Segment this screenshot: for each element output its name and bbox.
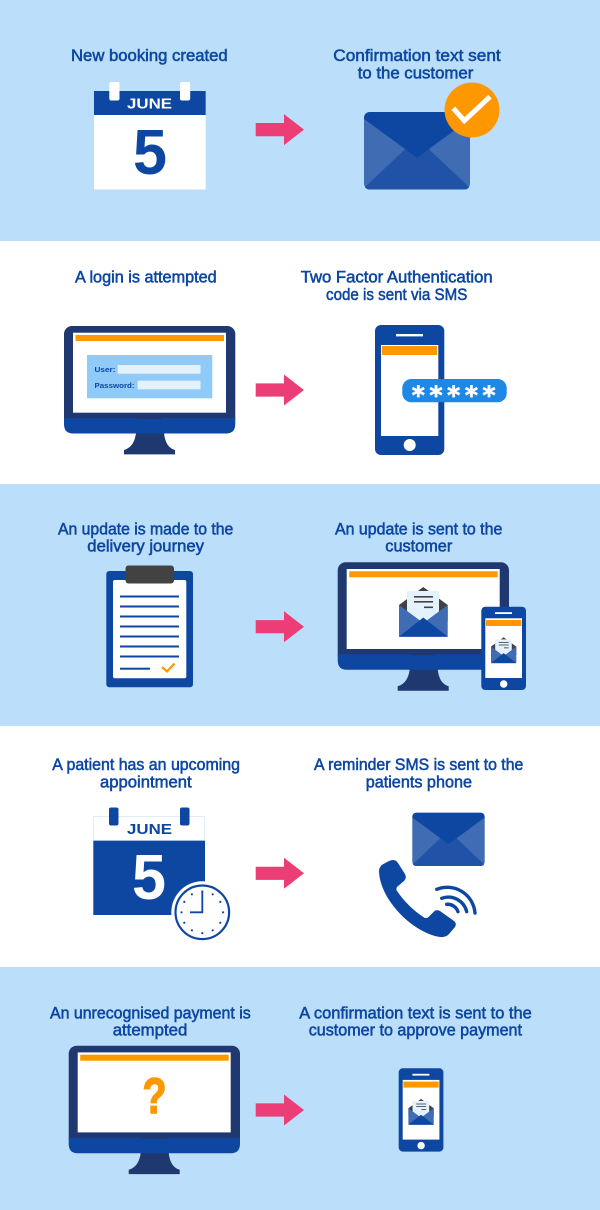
heading: upcoming appointment: appointment — [100, 772, 192, 791]
heading: update sent: customer — [385, 537, 453, 556]
heading: two factor code: Two Factor Authentication — [301, 268, 493, 287]
heading: confirmation text: to the customer — [358, 63, 474, 82]
heading: unrecognised payment — [50, 1003, 251, 1040]
icon: calendar: JUNE — [127, 96, 172, 112]
heading: confirmation text — [333, 46, 501, 82]
arrow — [256, 611, 304, 642]
heading: update sent — [335, 519, 502, 556]
heading: unrecognised payment: An unrecognised payment is — [50, 1003, 251, 1022]
icon: calendar with clock — [93, 808, 233, 943]
heading: new booking: New booking created — [71, 46, 228, 65]
heading: update sent: An update is sent to the — [335, 519, 502, 538]
panel: booking confirmation — [0, 0, 600, 241]
icon: monitor with question mark — [69, 1046, 240, 1174]
heading: two factor code: code is sent via SMS — [326, 285, 467, 304]
heading: login attempted: A login is attempted — [75, 268, 217, 287]
icon: monitor with login form: User: — [94, 365, 116, 374]
arrow — [256, 1094, 304, 1126]
heading: approve payment: A confirmation text is sent to the — [299, 1003, 532, 1022]
icon: monitor with question mark: ? — [142, 1068, 166, 1124]
arrow — [256, 374, 304, 406]
icon: calendar — [94, 82, 206, 190]
heading: upcoming appointment: A patient has an upcoming — [52, 755, 240, 774]
heading: upcoming appointment — [52, 755, 240, 791]
icon: monitor with login form: Password: — [94, 381, 134, 390]
panel: payment approval — [0, 967, 600, 1210]
panel: two factor login — [0, 241, 600, 484]
arrow — [256, 858, 304, 889]
icon: monitor and phone with open envelope — [338, 562, 526, 691]
icon: envelope — [412, 813, 485, 866]
icon: envelope with check badge — [364, 82, 500, 190]
arrow — [256, 114, 304, 145]
heading: reminder sms: A reminder SMS is sent to the — [314, 755, 523, 774]
heading: confirmation text: Confirmation text sent — [333, 46, 501, 65]
heading: unrecognised payment: attempted — [113, 1021, 187, 1040]
icon: calendar with clock: 5 — [132, 841, 166, 913]
heading: delivery journey: delivery journey — [87, 537, 204, 556]
heading: two factor code — [301, 268, 493, 304]
icon: phone with code — [375, 325, 507, 455]
heading: approve payment — [299, 1003, 532, 1040]
icon: phone with open envelope — [399, 1068, 443, 1152]
panel: appointment reminder — [0, 726, 600, 967]
icon: phone handset with signal — [379, 860, 475, 937]
icon: clipboard — [106, 566, 193, 687]
heading: delivery journey — [58, 519, 233, 556]
heading: approve payment: customer to approve payment — [309, 1021, 522, 1040]
heading: delivery journey: An update is made to the — [58, 519, 233, 538]
panel: delivery update — [0, 484, 600, 726]
heading: reminder sms — [314, 755, 523, 791]
heading: reminder sms: patients phone — [366, 772, 472, 791]
icon: calendar with clock: JUNE — [127, 821, 172, 838]
icon: phone with code: ***** — [412, 381, 500, 410]
icon: calendar: 5 — [133, 116, 167, 188]
icon: monitor with login form — [64, 326, 235, 454]
